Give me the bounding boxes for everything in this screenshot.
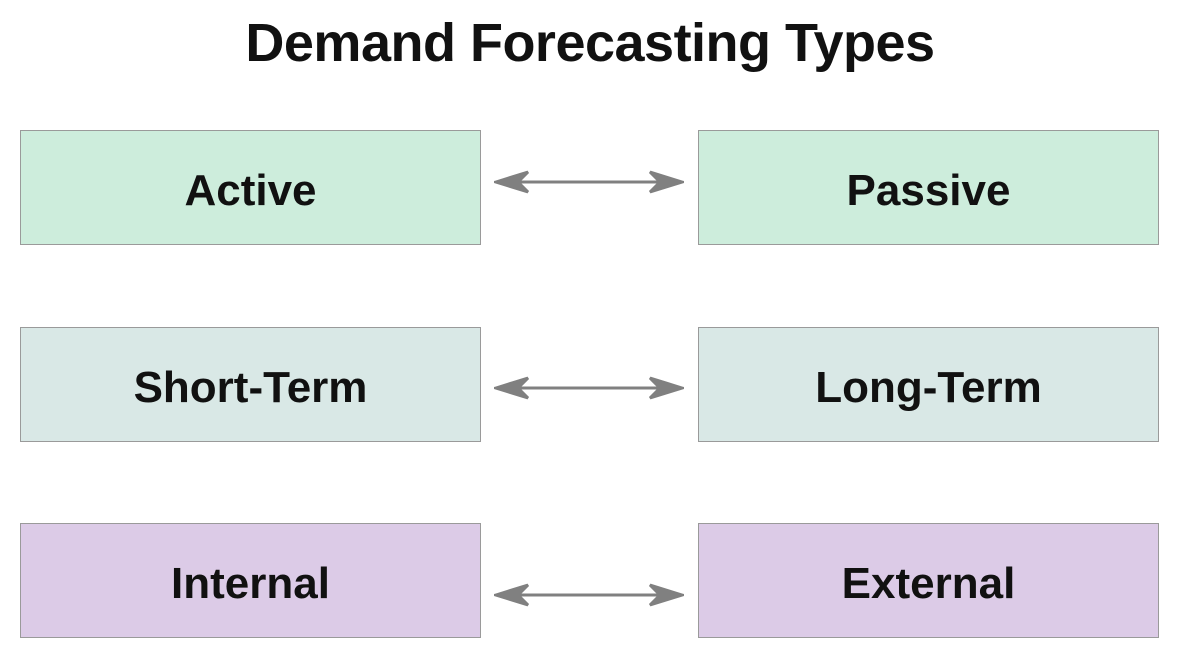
box: External — [698, 523, 1159, 638]
arrow: row 2 — [494, 376, 684, 400]
box: Long-Term — [698, 327, 1159, 442]
box: Active: Active — [184, 166, 317, 214]
box: Internal — [20, 523, 481, 638]
box: Long-Term: Long-Term — [815, 362, 1042, 412]
box: Passive — [698, 130, 1159, 245]
box: Short-Term: Short-Term — [134, 362, 367, 412]
title: Demand Forecasting Types — [245, 13, 935, 73]
box: Short-Term — [20, 327, 481, 442]
box: Internal: Internal — [171, 558, 330, 608]
box: External: External — [842, 558, 1015, 608]
arrow: row 3 — [494, 584, 684, 606]
box: Passive: Passive — [847, 166, 1010, 214]
arrow: row 1 — [494, 170, 684, 194]
box: Active — [20, 130, 481, 245]
